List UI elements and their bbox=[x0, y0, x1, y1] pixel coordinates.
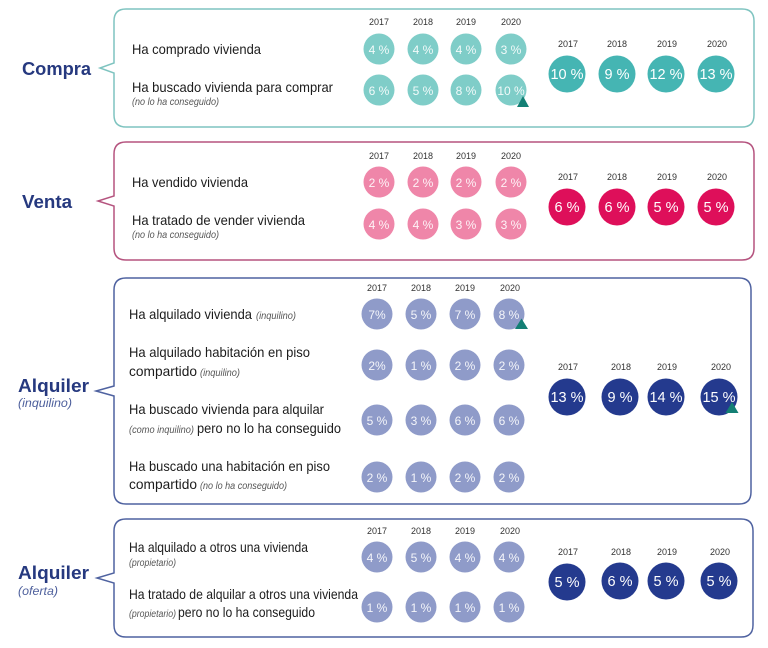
icon: up triangle small bbox=[515, 318, 528, 329]
large circles: Alquiler inquilino: 9 % bbox=[608, 390, 633, 406]
small circles: Compra: 4 % bbox=[413, 43, 434, 57]
small circles: Alquiler inquilino: 6 % bbox=[455, 414, 476, 428]
row labels: Alquiler inquilino: (como inquilino) bbox=[129, 425, 194, 436]
small circles: Alquiler oferta: 1 % bbox=[367, 601, 388, 615]
large years: Alquiler oferta: 2017 bbox=[558, 547, 578, 557]
small circles: Alquiler inquilino bbox=[362, 298, 524, 492]
small years: Venta bbox=[369, 151, 521, 161]
small circles: Alquiler inquilino: 5 % bbox=[367, 414, 388, 428]
small circles: Venta bbox=[364, 166, 526, 240]
row labels: Alquiler inquilino: Ha alquilado habitación en piso bbox=[129, 344, 310, 360]
large circles: Compra: 13 % bbox=[699, 67, 733, 83]
large years: Venta: 2017 bbox=[558, 172, 578, 182]
panel: Alquiler (oferta) bbox=[18, 519, 753, 637]
large years: Compra: 2019 bbox=[657, 39, 677, 49]
row labels: Alquiler inquilino: Ha buscado vivienda para alquilar bbox=[129, 401, 324, 417]
large circles: Compra: 12 % bbox=[649, 67, 683, 83]
icon: up triangle large bbox=[726, 402, 738, 413]
small circles: Alquiler oferta bbox=[362, 542, 524, 622]
panel: Compra bbox=[22, 9, 754, 127]
row labels: Alquiler oferta: Ha tratado de alquilar a otros una vivienda bbox=[129, 586, 358, 602]
small circles: Compra: 5 % bbox=[413, 84, 434, 98]
small circles: Alquiler inquilino: 3 % bbox=[411, 414, 432, 428]
heading: Alquiler (oferta): (oferta) bbox=[18, 586, 58, 598]
large years: Alquiler inquilino: 2020 bbox=[711, 362, 731, 372]
small circles: Compra: 10 % bbox=[497, 84, 525, 98]
small circles: Alquiler inquilino: 2 % bbox=[367, 471, 388, 485]
large circles: Compra bbox=[548, 56, 734, 92]
small years: Alquiler inquilino: 2020 bbox=[500, 283, 520, 293]
small circles: Alquiler inquilino: 7% bbox=[368, 308, 386, 322]
small circles: Venta: 2 % bbox=[456, 176, 477, 190]
small circles: Alquiler inquilino: 2% bbox=[368, 359, 386, 373]
small circles: Venta: 3 % bbox=[456, 218, 477, 232]
heading: Alquiler (inquilino) bbox=[18, 376, 89, 410]
small years: Venta: 2020 bbox=[501, 151, 521, 161]
small years: Venta: 2017 bbox=[369, 151, 389, 161]
small circles: Alquiler inquilino: 7 % bbox=[455, 308, 476, 322]
row labels: Venta: Ha vendido vivienda bbox=[132, 174, 248, 190]
small circles: Alquiler oferta: 5 % bbox=[411, 551, 432, 565]
small years: Compra: 2019 bbox=[456, 17, 476, 27]
small circles: Alquiler inquilino: 2 % bbox=[455, 359, 476, 373]
icon: up triangle bbox=[517, 96, 529, 107]
small circles: Venta: 2 % bbox=[413, 176, 434, 190]
large circles: Alquiler oferta: 5 % bbox=[706, 574, 732, 590]
small circles: Venta: 4 % bbox=[369, 218, 390, 232]
row labels: Alquiler inquilino: compartido bbox=[129, 476, 197, 492]
row labels: Alquiler inquilino: pero no lo ha conseguido bbox=[197, 420, 341, 436]
small circles: Compra: 3 % bbox=[501, 43, 522, 57]
small circles: Compra: 4 % bbox=[369, 43, 390, 57]
large circles: Venta: 5 % bbox=[704, 200, 729, 216]
large circles: Venta: 6 % bbox=[554, 200, 580, 216]
heading: Alquiler (oferta) bbox=[18, 563, 89, 598]
small years: Alquiler oferta: 2019 bbox=[455, 526, 475, 536]
small circles: Alquiler oferta: 4 % bbox=[499, 551, 520, 565]
panel: Venta bbox=[22, 142, 754, 260]
row labels: Alquiler oferta: (propietario) bbox=[129, 609, 176, 620]
panel outline: Compra bbox=[100, 9, 754, 127]
row labels: Venta: (no lo ha conseguido) bbox=[132, 230, 219, 241]
small years: Compra bbox=[369, 17, 521, 27]
row labels: Alquiler inquilino bbox=[129, 306, 341, 492]
panel outline: Alquiler inquilino bbox=[96, 278, 751, 504]
row labels: Venta: Ha tratado de vender vivienda bbox=[132, 212, 305, 228]
small circles: Venta: 2 % bbox=[369, 176, 390, 190]
heading: Alquiler (oferta): Alquiler bbox=[18, 563, 89, 583]
row labels: Compra: Ha buscado vivienda para comprar bbox=[132, 79, 333, 95]
small circles: Alquiler inquilino: 1 % bbox=[411, 359, 432, 373]
small circles: Venta: 4 % bbox=[413, 218, 434, 232]
heading: Alquiler (inquilino): Alquiler bbox=[18, 376, 89, 396]
row labels: Alquiler inquilino: Ha buscado una habitación en piso bbox=[129, 458, 330, 474]
large years: Venta: 2018 bbox=[607, 172, 627, 182]
small circles: Alquiler inquilino: 6 % bbox=[499, 414, 520, 428]
row labels: Compra bbox=[132, 41, 333, 108]
small circles: Alquiler oferta: 4 % bbox=[367, 551, 388, 565]
row labels: Alquiler oferta: pero no lo ha conseguido bbox=[178, 604, 315, 620]
row labels: Alquiler oferta: (propietario) bbox=[129, 558, 176, 569]
small circles: Alquiler inquilino: 5 % bbox=[411, 308, 432, 322]
heading: Venta: Venta bbox=[22, 192, 73, 212]
large years: Compra: 2017 bbox=[558, 39, 578, 49]
small circles: Alquiler inquilino: 2 % bbox=[455, 471, 476, 485]
large circles: Alquiler oferta: 5 % bbox=[654, 574, 679, 590]
small circles: Compra: 6 % bbox=[369, 84, 390, 98]
row labels: Alquiler inquilino: Ha alquilado vivienda bbox=[129, 306, 252, 322]
small circles: Alquiler inquilino: 2 % bbox=[499, 471, 520, 485]
row labels: Alquiler inquilino: (no lo ha conseguido) bbox=[200, 481, 287, 492]
small years: Venta: 2019 bbox=[456, 151, 476, 161]
large years: Alquiler oferta: 2020 bbox=[710, 547, 730, 557]
small years: Compra: 2017 bbox=[369, 17, 389, 27]
small circles: Alquiler inquilino: 2 % bbox=[499, 359, 520, 373]
large years: Alquiler inquilino: 2019 bbox=[657, 362, 677, 372]
large years: Venta bbox=[558, 172, 727, 182]
small circles: Alquiler oferta: 4 % bbox=[455, 551, 476, 565]
small years: Alquiler inquilino: 2017 bbox=[367, 283, 387, 293]
small circles: Venta: 2 % bbox=[501, 176, 522, 190]
small years: Compra: 2018 bbox=[413, 17, 433, 27]
large circles: Alquiler inquilino bbox=[548, 378, 738, 416]
small years: Alquiler oferta: 2020 bbox=[500, 526, 520, 536]
large circles: Compra: 9 % bbox=[604, 67, 630, 83]
panel outline: Alquiler oferta bbox=[97, 519, 753, 637]
heading: Alquiler (inquilino): (inquilino) bbox=[18, 398, 72, 410]
small years: Alquiler oferta: 2017 bbox=[367, 526, 387, 536]
large circles: Venta bbox=[548, 188, 734, 226]
small circles: Alquiler inquilino: 1 % bbox=[411, 471, 432, 485]
small years: Alquiler inquilino bbox=[367, 283, 520, 293]
row labels: Alquiler oferta bbox=[129, 539, 358, 620]
small circles: Alquiler inquilino: 8 % bbox=[499, 308, 520, 322]
large years: Venta: 2019 bbox=[657, 172, 677, 182]
large circles: Venta: 6 % bbox=[604, 200, 630, 216]
large years: Alquiler oferta: 2018 bbox=[611, 547, 631, 557]
panel: Alquiler (inquilino) bbox=[18, 278, 751, 504]
large years: Alquiler inquilino: 2018 bbox=[611, 362, 631, 372]
small years: Alquiler oferta bbox=[367, 526, 520, 536]
row labels: Compra: Ha comprado vivienda bbox=[132, 41, 261, 57]
small years: Venta: 2018 bbox=[413, 151, 433, 161]
small circles: Compra: 8 % bbox=[456, 84, 477, 98]
heading: Compra: Compra bbox=[22, 59, 92, 79]
large circles: Venta: 5 % bbox=[654, 200, 679, 216]
row labels: Alquiler inquilino: (inquilino) bbox=[200, 368, 240, 379]
small circles: Compra bbox=[364, 34, 526, 106]
large circles: Alquiler inquilino: 15 % bbox=[702, 390, 736, 406]
large years: Alquiler inquilino: 2017 bbox=[558, 362, 578, 372]
row labels: Alquiler inquilino: (inquilino) bbox=[256, 311, 296, 322]
row labels: Alquiler oferta: Ha alquilado a otros una vivienda bbox=[129, 539, 308, 555]
large years: Alquiler oferta bbox=[558, 547, 730, 557]
large years: Compra: 2018 bbox=[607, 39, 627, 49]
row labels: Alquiler inquilino: compartido bbox=[129, 363, 197, 379]
small circles: Compra: 4 % bbox=[456, 43, 477, 57]
large circles: Alquiler oferta: 6 % bbox=[608, 574, 633, 590]
large years: Alquiler inquilino bbox=[558, 362, 731, 372]
large circles: Compra: 10 % bbox=[550, 67, 584, 83]
large years: Compra bbox=[558, 39, 727, 49]
large years: Venta: 2020 bbox=[707, 172, 727, 182]
row labels: Compra: (no lo ha conseguido) bbox=[132, 97, 219, 108]
panel outline: Venta bbox=[98, 142, 754, 260]
small circles: Alquiler oferta: 1 % bbox=[455, 601, 476, 615]
large circles: Alquiler inquilino: 13 % bbox=[550, 390, 584, 406]
large circles: Alquiler inquilino: 14 % bbox=[649, 390, 683, 406]
large years: Compra: 2020 bbox=[707, 39, 727, 49]
small years: Compra: 2020 bbox=[501, 17, 521, 27]
small years: Alquiler inquilino: 2019 bbox=[455, 283, 475, 293]
row labels: Venta bbox=[132, 174, 305, 241]
large circles: Alquiler oferta: 5 % bbox=[554, 575, 580, 591]
large circles: Alquiler oferta bbox=[548, 562, 738, 600]
small circles: Alquiler oferta: 1 % bbox=[499, 601, 520, 615]
small circles: Alquiler oferta: 1 % bbox=[411, 601, 432, 615]
small years: Alquiler oferta: 2018 bbox=[411, 526, 431, 536]
small years: Alquiler inquilino: 2018 bbox=[411, 283, 431, 293]
small circles: Venta: 3 % bbox=[501, 218, 522, 232]
large years: Alquiler oferta: 2019 bbox=[657, 547, 677, 557]
